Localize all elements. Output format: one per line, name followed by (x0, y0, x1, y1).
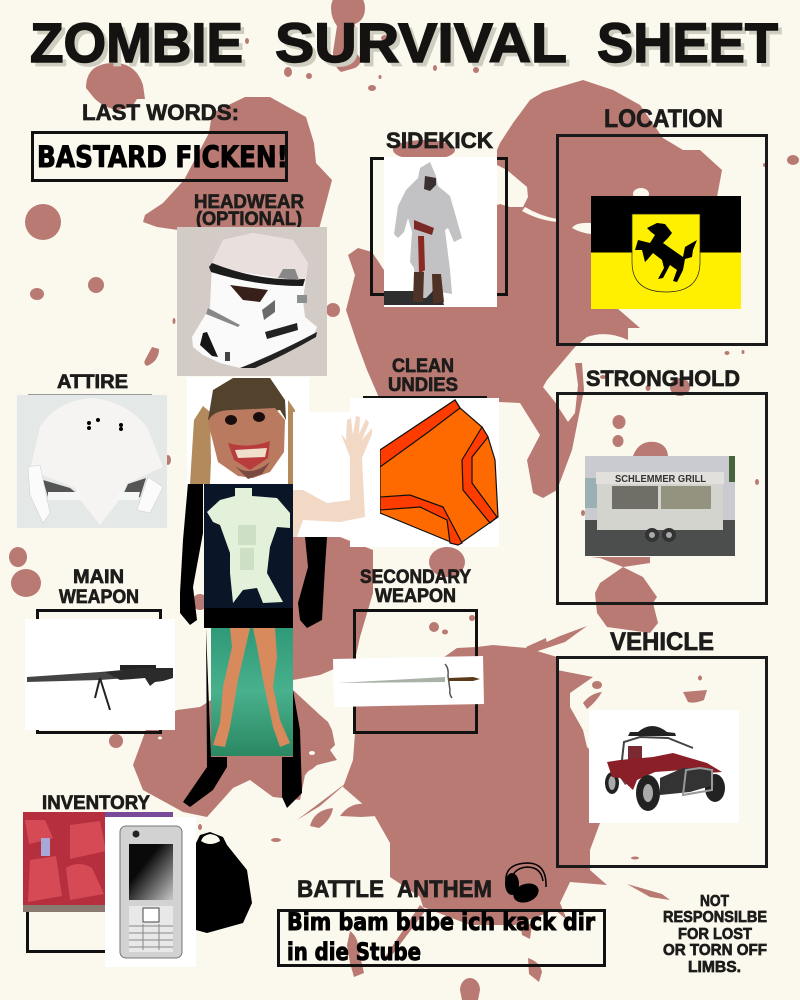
label: inventory: INVENTORY (42, 793, 150, 814)
label: main weapon: WEAPON (59, 587, 139, 608)
disclaimer: RESPONSILBE (663, 909, 767, 926)
battle anthem box: Bim bam bube ich kack dir (287, 908, 595, 936)
battle anthem box (278, 908, 604, 966)
label: location: LOCATION (604, 105, 723, 133)
image: clean undies (350, 398, 499, 547)
title: ZOMBIE (34, 15, 247, 78)
label: main weapon (59, 567, 139, 608)
title: SURVIVAL (279, 15, 571, 78)
image: sniper rifle (25, 619, 175, 730)
icon: headphones (505, 863, 546, 906)
image: torso statue (204, 484, 293, 608)
image: meat (23, 812, 173, 912)
label: stronghold: STRONGHOLD (586, 366, 740, 391)
image: food trailer: SCHLEMMER GRILL (615, 474, 706, 485)
label: battle anthem (297, 876, 492, 903)
label: attire: ATTIRE (57, 372, 128, 393)
label: clean undies (388, 356, 458, 396)
label: sidekick: SIDEKICK (386, 128, 493, 153)
image: legs (211, 628, 293, 756)
last words box (32, 132, 288, 180)
disclaimer: OR TORN OFF (663, 942, 767, 959)
label: secondary weapon: WEAPON (375, 586, 456, 607)
image: attire armour (17, 394, 167, 528)
image: sidekick assassin (384, 157, 497, 307)
label: main weapon: MAIN (73, 567, 124, 588)
main weapon box (38, 610, 160, 732)
title: SHEET (601, 15, 782, 78)
figure body silhouette (180, 483, 327, 808)
image: red buggy (589, 710, 739, 823)
image: mobile phone (105, 817, 196, 967)
inventory box (28, 900, 118, 952)
battle anthem box: in die Stube (287, 938, 421, 966)
clean undies box (363, 396, 487, 398)
title (30, 11, 782, 78)
image: stormtrooper helmet (177, 227, 327, 376)
image: face (187, 377, 309, 484)
stronghold box (558, 394, 766, 604)
disclaimer (663, 893, 767, 976)
image: food trailer (585, 456, 735, 556)
label: secondary weapon: SECONDARY (360, 567, 471, 588)
label: headwear: (OPTIONAL) (196, 209, 302, 230)
label: clean undies: UNDIES (388, 375, 458, 396)
label: last words: LAST WORDS: (82, 100, 239, 125)
label: secondary weapon (360, 567, 471, 607)
label: headwear: HEADWEAR (194, 192, 304, 213)
title: ZOMBIE (30, 11, 243, 74)
title: SURVIVAL (275, 11, 567, 74)
last words box: BASTARD FICKEN! (37, 140, 288, 174)
label: headwear (194, 192, 304, 230)
sidekick box (372, 158, 506, 294)
label: battle anthem: BATTLE (297, 876, 384, 903)
secondary weapon box (354, 610, 476, 732)
label: vehicle: VEHICLE (610, 628, 714, 656)
icon: stuttgart flag (591, 196, 741, 309)
label: battle anthem: ANTHEM (397, 876, 492, 903)
location box with flag (558, 136, 766, 344)
vehicle box (558, 658, 766, 866)
disclaimer: NOT (700, 893, 729, 910)
disclaimer: FOR LOST (678, 926, 752, 943)
image: sword (333, 656, 484, 707)
disclaimer: LIMBS. (688, 959, 741, 976)
cream gaps in blood (158, 188, 649, 779)
label: clean undies: CLEAN (392, 356, 454, 377)
title: SHEET (597, 11, 778, 74)
image: waving arm (293, 412, 380, 537)
icon: backpack (196, 832, 252, 933)
